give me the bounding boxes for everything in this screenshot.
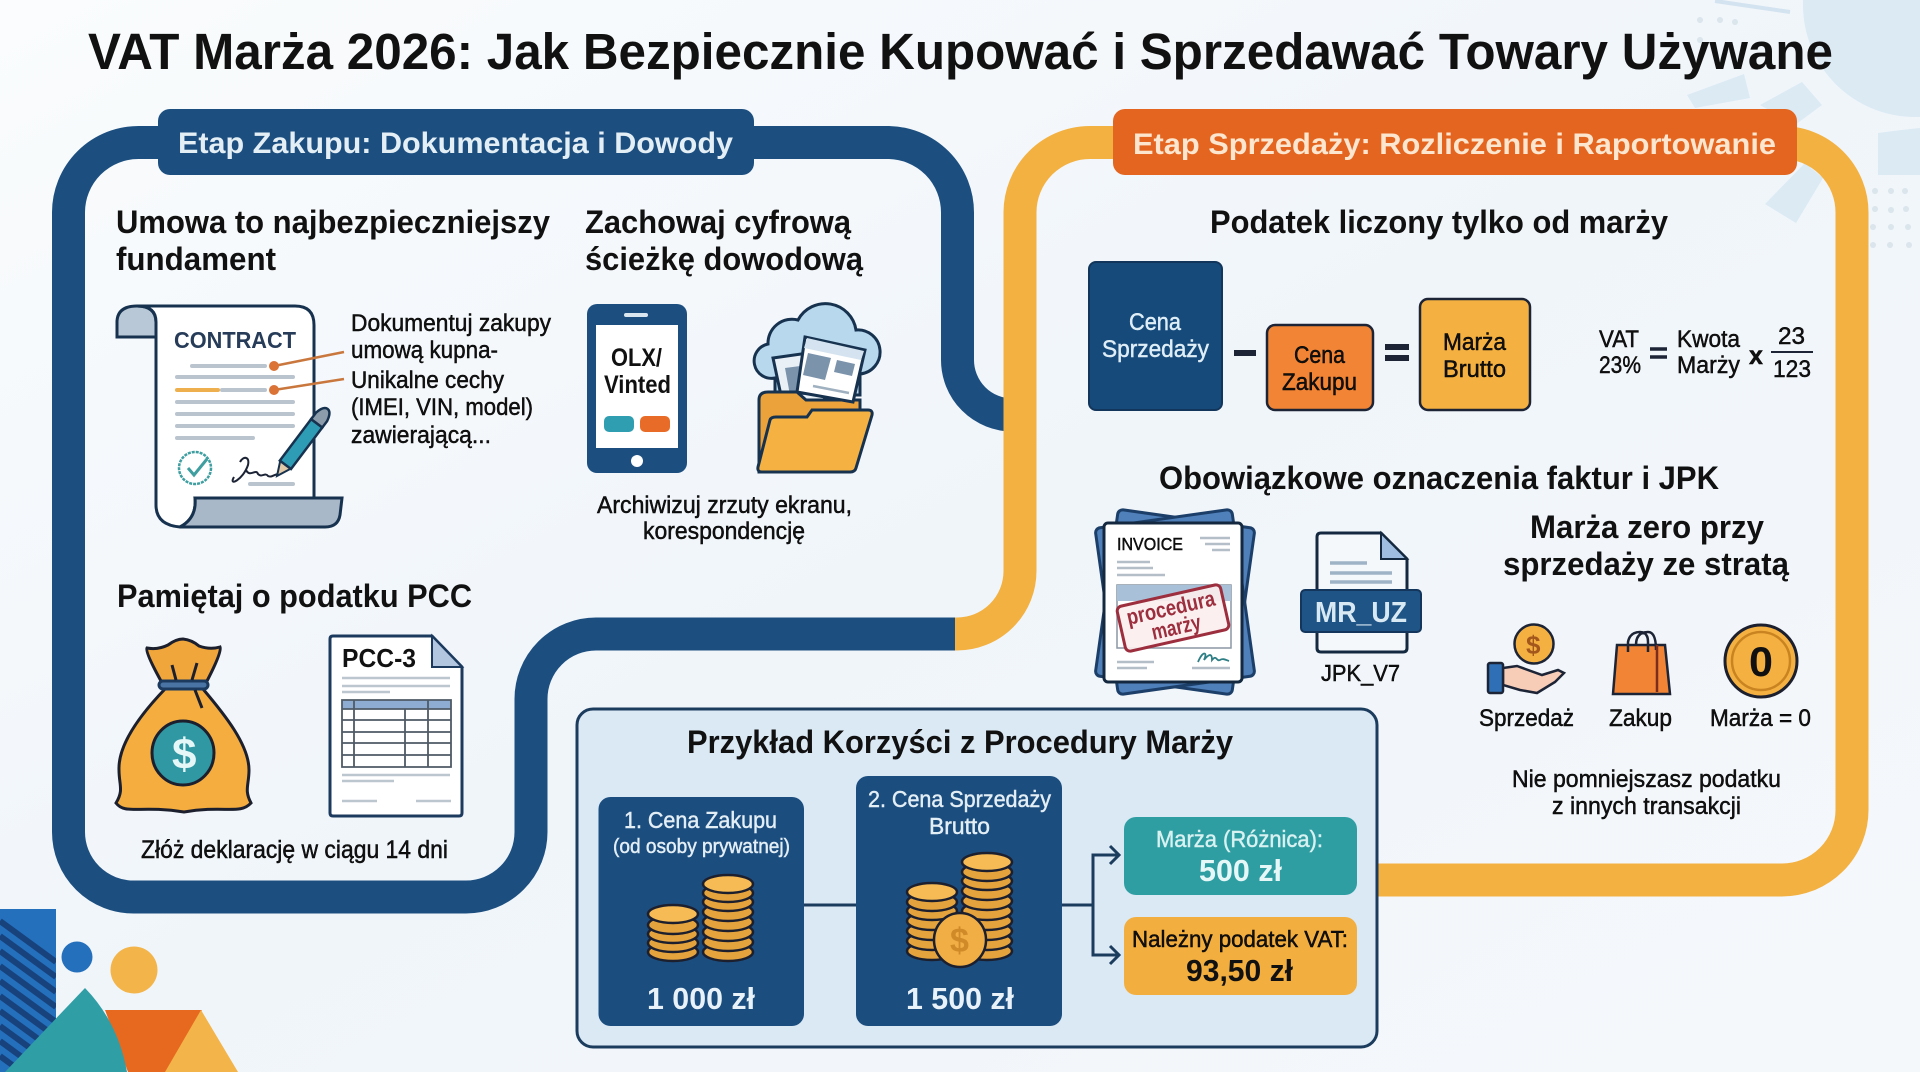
heading: contract: fundament (116, 241, 276, 277)
icon: coin stacks (648, 875, 753, 961)
icon: phone: Vinted (604, 371, 671, 399)
box: sale price (1089, 262, 1222, 410)
operator: equals (1385, 347, 1409, 358)
heading: zero margin: Marża zero przy (1530, 509, 1764, 545)
formula: VAT 23%: VAT (1599, 326, 1639, 353)
icon: phone (587, 304, 687, 473)
text: zero margin note (1512, 766, 1781, 820)
panel: margin tax formula (1089, 204, 1813, 410)
heading: zero margin (1503, 509, 1789, 582)
box: sale price card (856, 776, 1062, 1026)
icon: MR_UZ file: MR_UZ (1315, 597, 1407, 629)
text: contract notes: (IMEI, VIN, model) (351, 394, 533, 421)
heading: purchase stage: Etap Zakupu: Dokumentacja i Dowody (178, 127, 733, 160)
icon: invoice with stamp: procedura (1124, 586, 1218, 630)
box: purchase price: Cena (1294, 342, 1346, 369)
heading: invoice markings: Obowiązkowe oznaczenia faktur i JPK (1159, 460, 1719, 496)
operator: minus (1234, 350, 1256, 356)
panel: contract block (116, 204, 552, 527)
heading: zero margin: sprzedaży ze stratą (1503, 546, 1789, 582)
icon: zero coin (1725, 625, 1797, 697)
icon: PCC-3 document (330, 636, 462, 816)
heading: contract: Umowa to najbezpieczniejszy (116, 204, 550, 240)
icon: shopping bag (1613, 632, 1670, 694)
box: purchase price: Zakupu (1282, 369, 1357, 396)
panel: zero margin (1479, 509, 1811, 820)
heading: digital trail: Zachowaj cyfrową (585, 204, 851, 240)
box: purchase price card: 1 000 zł (647, 981, 755, 1016)
box: purchase price (1267, 325, 1373, 410)
box: margin result: 500 zł (1199, 853, 1282, 888)
formula: VAT 23%: x (1749, 342, 1763, 370)
text: archive note: Archiwizuj zrzuty ekranu, (597, 492, 852, 519)
icon: MR_UZ file (1301, 533, 1421, 652)
formula: VAT 23%: 23 (1778, 323, 1805, 350)
panel: invoice markings (1095, 460, 1719, 695)
panel: PCC block (116, 578, 472, 864)
heading: sale stage: Etap Sprzedaży: Rozliczenie i Raportowanie (1133, 128, 1776, 161)
text: zero margin note: z innych transakcji (1552, 793, 1741, 820)
box: gross margin: Brutto (1443, 356, 1506, 383)
labels: zero margin icons: Sprzedaż (1479, 705, 1574, 732)
box: sale price card: 2. Cena Sprzedaży (868, 786, 1051, 812)
icon: coin stacks with dollar coin: $ (950, 922, 969, 960)
path: sale stage yellow track (955, 142, 1852, 880)
icon: PCC-3 document: PCC-3 (342, 643, 416, 673)
icon: cloud and folder (754, 304, 880, 472)
box: sale price card: 1 500 zł (906, 981, 1014, 1016)
decoration: bottom left shapes (0, 909, 238, 1072)
icon: hand with coin: $ (1526, 630, 1541, 660)
box: VAT due result: 93,50 zł (1186, 953, 1293, 988)
icon: invoice with stamp: INVOICE (1117, 534, 1183, 554)
box: sale price: Cena (1129, 309, 1182, 336)
icon: contract scroll (117, 306, 344, 527)
formula: VAT 23%: Kwota (1677, 326, 1741, 353)
heading: purchase stage (158, 109, 754, 175)
box: sale price: Sprzedaży (1102, 336, 1209, 363)
text: archive note (597, 492, 852, 545)
icon: money bag (116, 639, 251, 812)
icon: hand with coin (1488, 624, 1564, 693)
text: contract notes: umową kupna- (351, 337, 498, 364)
box: purchase price card (598, 797, 804, 1026)
box: sale price card: Brutto (929, 813, 990, 839)
formula: VAT 23%: 123 (1773, 356, 1811, 383)
heading: digital trail: ścieżkę dowodową (585, 241, 863, 277)
path: purchase stage blue track (68, 142, 1012, 897)
box: margin result: Marża (Różnica): (1156, 826, 1323, 852)
formula: VAT 23%: 23% (1599, 352, 1641, 379)
formula: VAT 23%: Marży (1677, 352, 1740, 379)
box: VAT due result: Należny podatek VAT: (1132, 926, 1348, 952)
heading: sale stage (1113, 109, 1797, 175)
box: purchase price card: 1. Cena Zakupu (624, 807, 777, 833)
box: margin result (1124, 817, 1357, 895)
decoration: top right sun (1687, 0, 1920, 248)
text: contract notes: Unikalne cechy (351, 367, 505, 394)
text: zero margin note: Nie pomniejszasz podatku (1512, 766, 1781, 793)
icon: contract scroll: CONTRACT (174, 327, 296, 353)
labels: zero margin icons: Marża = 0 (1710, 705, 1811, 732)
panel: digital trail block (585, 204, 880, 545)
icon: invoice with stamp: marży (1149, 609, 1204, 645)
icon: phone: OLX/ (611, 344, 662, 372)
connector arrows (804, 846, 1119, 964)
box: gross margin: Marża (1443, 329, 1507, 356)
text: PCC deadline: Złóż deklarację w ciągu 14 dni (141, 836, 448, 864)
text: archive note: korespondencję (643, 518, 805, 545)
heading: PCC: Pamiętaj o podatku PCC (117, 578, 472, 614)
labels: zero margin icons (1479, 705, 1811, 732)
heading: contract (116, 204, 550, 277)
text: contract notes (351, 310, 552, 449)
title: VAT Marża 2026: Jak Bezpiecznie Kupować i Sprzedawać Towary Używane (88, 23, 1833, 80)
icon: money bag: $ (172, 730, 196, 779)
icon: zero coin: 0 (1749, 638, 1773, 685)
heading: digital trail (585, 204, 863, 277)
labels: zero margin icons: Zakup (1609, 705, 1672, 732)
formula: VAT 23% (1599, 323, 1813, 383)
text: contract notes: Dokumentuj zakupy (351, 310, 552, 337)
label: JPK_V7: JPK_V7 (1321, 660, 1400, 686)
heading: margin tax: Podatek liczony tylko od marży (1210, 204, 1668, 240)
icon: coin stacks with dollar coin (907, 853, 1012, 967)
icon: invoice with stamp (1095, 509, 1255, 695)
box: gross margin (1420, 299, 1530, 410)
text: contract notes: zawierającą... (351, 422, 491, 449)
heading: example: Przykład Korzyści z Procedury Marży (687, 724, 1233, 760)
box: purchase price card: (od osoby prywatnej) (613, 836, 790, 858)
box: VAT due result (1124, 917, 1357, 995)
panel: margin benefit example (577, 709, 1377, 1047)
